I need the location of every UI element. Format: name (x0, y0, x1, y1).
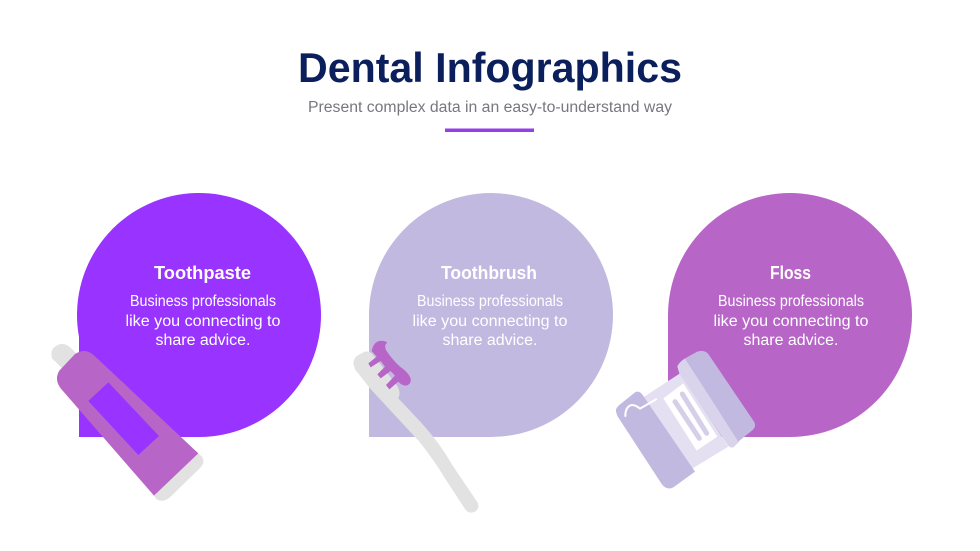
heading: toothbrush: Toothbrush (441, 263, 537, 283)
icon: toothbrush (353, 341, 478, 513)
heading: floss: Floss (770, 263, 811, 283)
title: Dental Infographics (298, 44, 682, 91)
toothbrush bristles (368, 341, 411, 389)
teardrop shape (668, 193, 912, 437)
panel: toothpaste (51, 193, 321, 501)
text block: toothbrush: like you connecting to (412, 313, 568, 330)
teardrop shape (369, 193, 613, 437)
text block: floss: Business professionals (718, 293, 864, 310)
panel: toothbrush (353, 193, 613, 513)
text block: toothpaste: Business professionals (130, 293, 276, 310)
text block: toothpaste: like you connecting to (126, 313, 280, 330)
title underline (445, 128, 534, 132)
text block: floss: share advice. (744, 332, 838, 349)
toothbrush handle (353, 351, 478, 513)
icon: toothpaste tube (51, 344, 203, 501)
text block: toothbrush: share advice. (442, 332, 538, 349)
text block: floss: like you connecting to (714, 313, 868, 330)
panel: floss (616, 193, 912, 488)
subtitle: Present complex data in an easy-to-understand way (308, 99, 672, 116)
teardrop shape (77, 193, 321, 437)
icon: floss box (616, 351, 755, 488)
heading: toothpaste: Toothpaste (154, 263, 251, 283)
text block: toothbrush: Business professionals (417, 293, 563, 310)
text block: toothpaste: share advice. (156, 332, 250, 349)
